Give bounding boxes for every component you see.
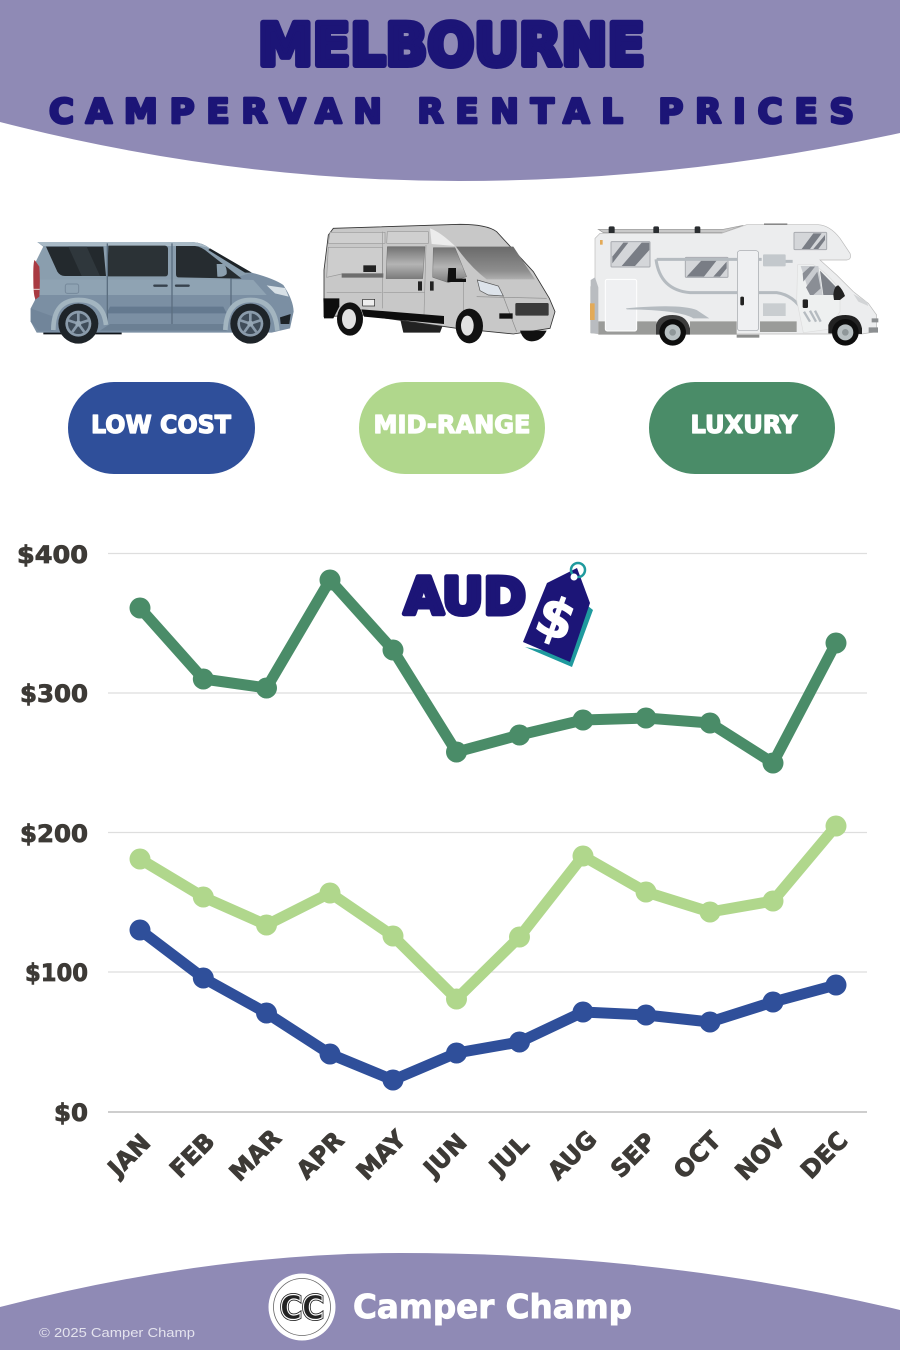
- copyright: © 2025 Camper Champ: [39, 1325, 195, 1340]
- legend pill: luxury: LUXURY: [690, 410, 798, 439]
- y axis labels: [17, 541, 88, 1127]
- logo: Camper Champ badge: CC: [280, 1288, 324, 1327]
- x axis month labels: MAR: [224, 1124, 287, 1187]
- x axis month labels: OCT: [668, 1126, 727, 1184]
- series: low cost: [130, 920, 846, 1090]
- x axis month labels: APR: [291, 1126, 350, 1185]
- x axis month labels: [101, 1124, 853, 1187]
- x axis month labels: SEP: [605, 1127, 661, 1183]
- legend pill: low cost: [68, 382, 255, 474]
- currency label: AUD: [404, 568, 526, 627]
- x axis month labels: JUL: [483, 1130, 535, 1182]
- logo: Camper Champ badge: [268, 1274, 336, 1340]
- series: luxury: [130, 570, 846, 774]
- line chart: monthly prices: [17, 541, 867, 1187]
- series: mid-range: [130, 816, 846, 1010]
- legend pill: mid-range: [359, 382, 545, 474]
- x axis month labels: MAY: [351, 1125, 412, 1186]
- y axis labels: $100: [25, 959, 88, 987]
- x axis month labels: JUN: [417, 1128, 472, 1184]
- x axis month labels: FEB: [164, 1127, 220, 1183]
- subtitle: CAMPERVAN RENTAL PRICES: [49, 92, 854, 132]
- x axis month labels: NOV: [730, 1124, 791, 1186]
- y axis labels: $200: [20, 820, 88, 848]
- legend pill: luxury: [649, 382, 835, 474]
- icon: low cost people mover van: [31, 242, 294, 344]
- icon: luxury motorhome: [590, 224, 878, 346]
- logo: Camper Champ badge: CC: [280, 1288, 324, 1327]
- footer banner: [0, 1253, 900, 1350]
- icon: price tag: $: [527, 582, 584, 654]
- brand name: Camper Champ: [353, 1287, 632, 1326]
- y axis labels: $400: [17, 541, 88, 569]
- x axis month labels: AUG: [542, 1125, 602, 1185]
- title: MELBOURNE: [258, 11, 645, 79]
- icon: mid-range panel van: [323, 224, 555, 343]
- header banner: [0, 0, 900, 181]
- y axis labels: $300: [20, 680, 88, 708]
- legend pill: mid-range: MID-RANGE: [374, 410, 530, 439]
- y axis labels: $0: [54, 1099, 88, 1127]
- x axis month labels: DEC: [795, 1126, 853, 1184]
- x axis month labels: JAN: [101, 1129, 156, 1183]
- icon: price tag: [523, 563, 593, 667]
- legend pill: low cost: LOW COST: [91, 410, 231, 439]
